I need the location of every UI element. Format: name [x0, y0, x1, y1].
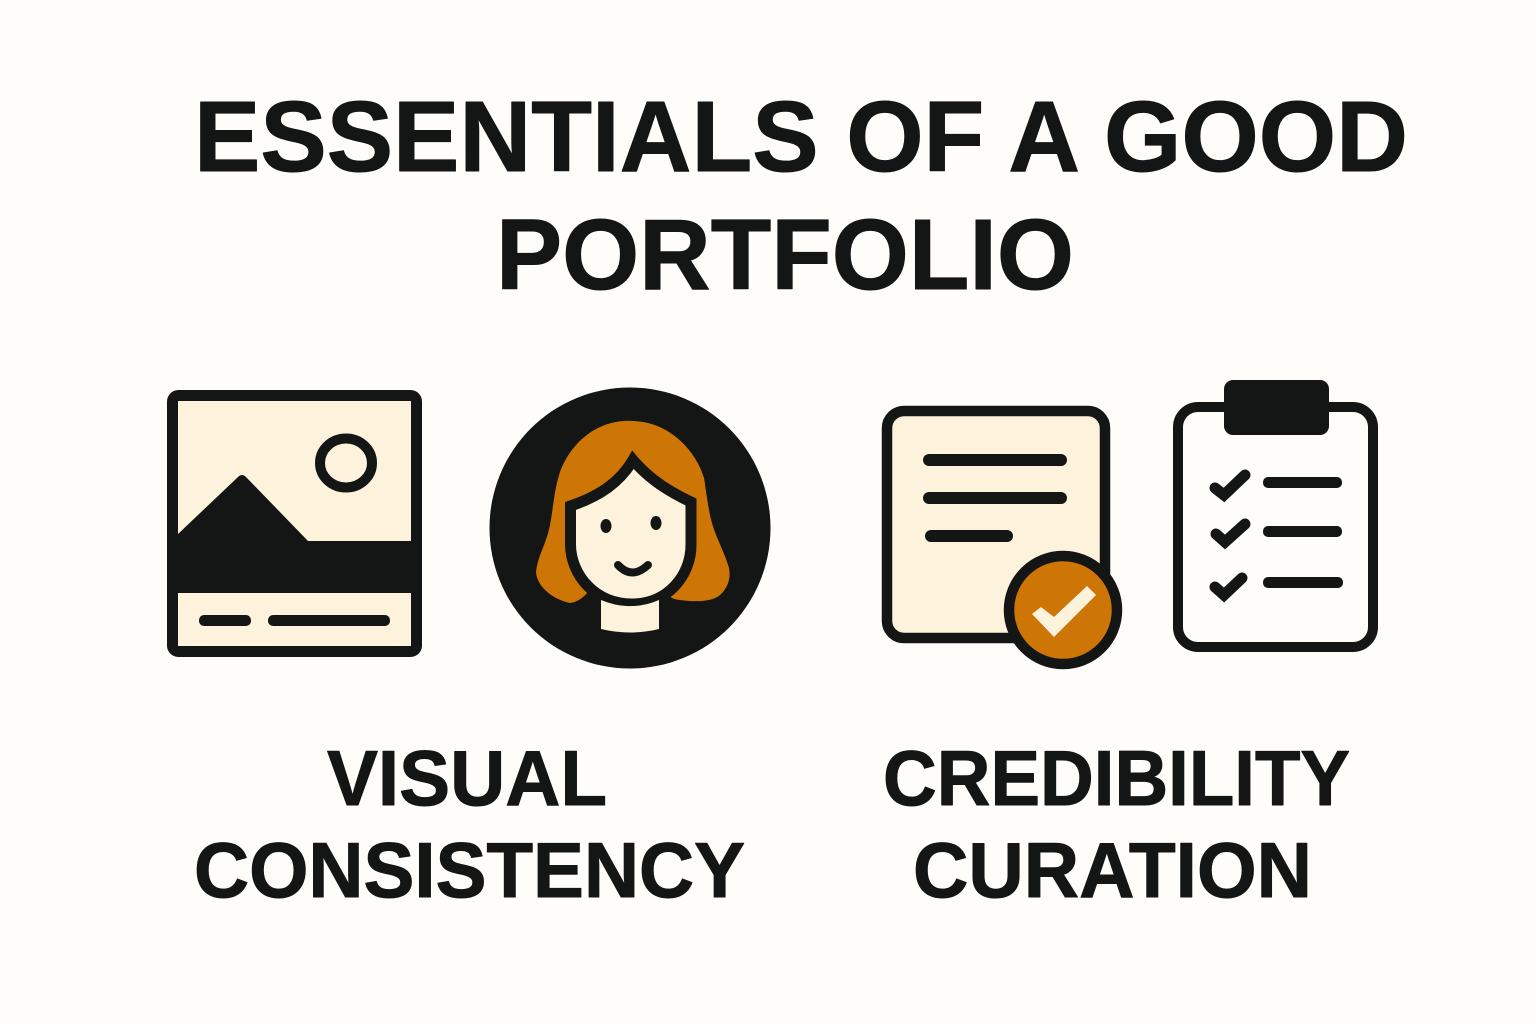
- eyes: [600, 519, 612, 533]
- hair: [536, 421, 730, 603]
- label: credibility curation: [883, 734, 1350, 914]
- text lines: [923, 454, 1067, 542]
- mountain and ground band: [178, 475, 411, 593]
- icon: clipboard checklist: [1178, 380, 1373, 647]
- icon: framed landscape image: [172, 396, 416, 652]
- checklist lines: [1263, 477, 1343, 588]
- face: [570, 460, 691, 604]
- label: visual consistency: VISUAL: [327, 734, 607, 822]
- sun: [320, 438, 372, 488]
- icon: document with check badge: [887, 411, 1117, 664]
- clip: [1224, 380, 1329, 435]
- check marks: [1215, 475, 1245, 595]
- label: credibility curation: CREDIBILITY: [883, 734, 1350, 822]
- check badge: [1009, 556, 1117, 664]
- title: [194, 81, 1408, 311]
- neck: [601, 600, 659, 632]
- title: ESSENTIALS OF A GOOD: [194, 81, 1408, 193]
- title: PORTFOLIO: [496, 199, 1074, 311]
- label: credibility curation: CURATION: [913, 826, 1312, 914]
- caption bars: [199, 615, 390, 626]
- icon: portrait in circle: [490, 388, 770, 668]
- label: visual consistency: CONSISTENCY: [194, 826, 745, 914]
- smile: [618, 565, 648, 572]
- label: visual consistency: [194, 734, 745, 914]
